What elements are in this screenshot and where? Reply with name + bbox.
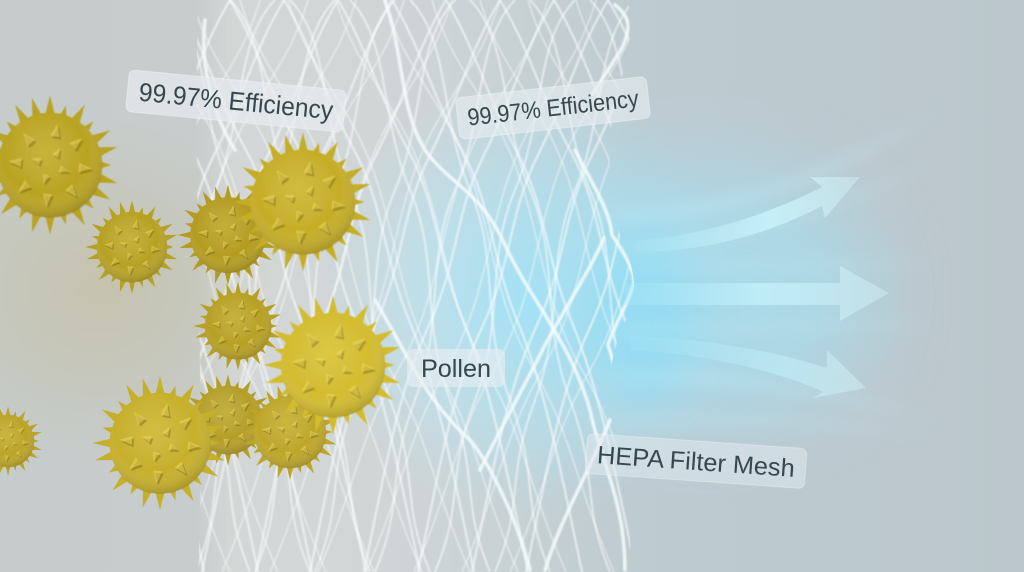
- pollen grain: [93, 376, 226, 510]
- arrow: lower: [630, 336, 866, 398]
- back strands: [196, 0, 630, 572]
- offset lattice strands: [197, 0, 630, 572]
- HEPA filter mesh: [196, 0, 634, 572]
- pollen grain: [194, 282, 282, 370]
- label: 99.97% Efficiency (right): [455, 76, 651, 140]
- middle strands: [196, 0, 630, 572]
- pollen grain: [0, 406, 42, 476]
- pollen grain: [85, 200, 178, 294]
- label: Pollen: [407, 349, 505, 387]
- label: 99.97% Efficiency (left): 99.97% Efficiency: [138, 77, 334, 125]
- pollen grain: [0, 95, 119, 235]
- pollen grain: [242, 384, 337, 480]
- label: HEPA Filter Mesh: HEPA Filter Mesh: [596, 441, 796, 483]
- air flow streaks: [590, 105, 950, 440]
- pollen grain: [182, 374, 273, 466]
- pollen grain: [263, 295, 402, 435]
- pollen grain: [233, 132, 372, 272]
- arrow: middle: [625, 266, 889, 321]
- arrow: upper: [636, 177, 860, 252]
- front strands: [204, 0, 634, 570]
- soft haze inside mesh: [196, 0, 636, 572]
- pollen grain: [178, 185, 278, 285]
- label: 99.97% Efficiency (right): 99.97% Efficiency: [466, 85, 640, 132]
- label: Pollen: Pollen: [421, 355, 491, 383]
- label: HEPA Filter Mesh: [585, 433, 807, 489]
